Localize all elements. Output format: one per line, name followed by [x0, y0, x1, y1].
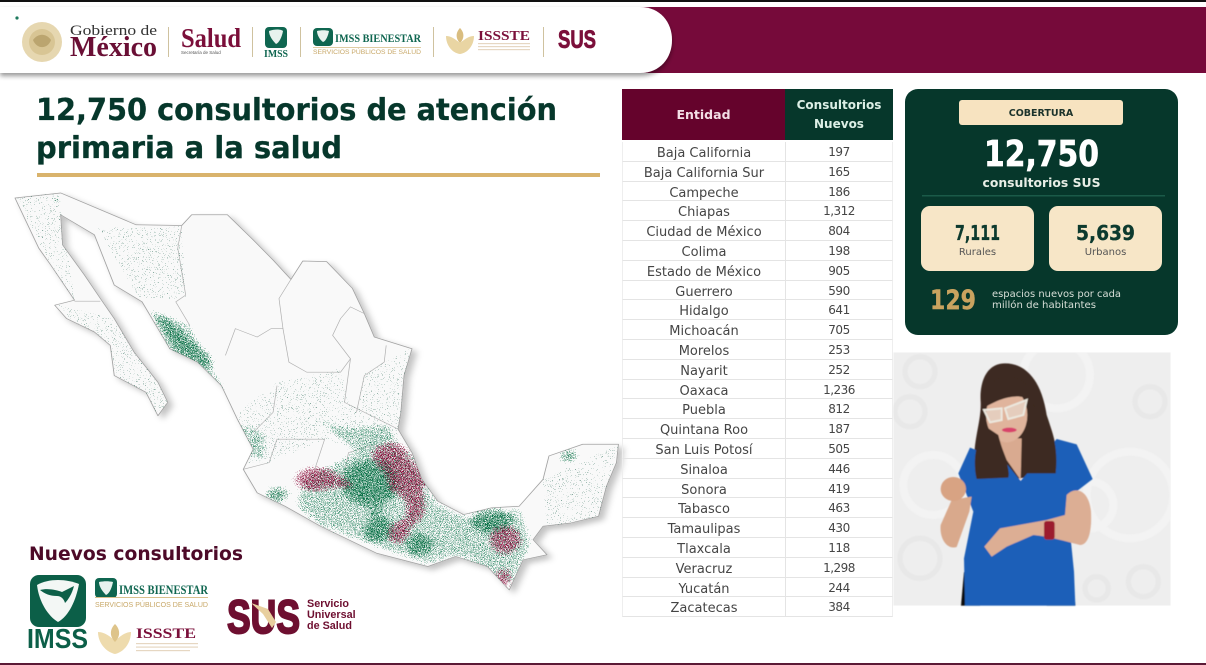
back hair: [974, 363, 1057, 480]
logo: IMSS Bienestar: SERVICIOS PÚBLICOS DE SALUD: [95, 600, 208, 609]
maroon banner: [640, 7, 1206, 73]
stat description: [992, 289, 1121, 311]
table rows: [622, 142, 893, 617]
table rows: Michoacán: [669, 324, 739, 339]
header logos: [15, 16, 596, 63]
table rows: Yucatán: [678, 582, 730, 597]
table rows: 384: [828, 600, 850, 614]
medium dots: [150, 310, 532, 585]
face: [986, 388, 1027, 442]
stat description: millón de habitantes: [992, 300, 1096, 311]
table rows: 430: [828, 521, 850, 535]
table rows: 253: [828, 343, 850, 357]
lower arm: [984, 490, 1091, 557]
title: [36, 93, 557, 166]
logo: Salud: Secretaría de Salud: [181, 50, 221, 55]
blouse: [958, 439, 1093, 606]
stat description: espacios nuevos por cada: [992, 289, 1121, 300]
table rows: Campeche: [669, 186, 739, 201]
raised fist: [941, 477, 966, 501]
table rows: 197: [828, 145, 850, 159]
logo: IMSS: [252, 27, 288, 60]
table header: Entidad: [676, 107, 731, 122]
raised arm: [941, 497, 972, 547]
table rows: Sonora: [681, 483, 727, 498]
table rows: Morelos: [679, 344, 729, 359]
bottom edge: [0, 663, 1206, 665]
white logo pill: [0, 7, 672, 73]
title: 12,750 consultorios de atención: [36, 93, 557, 128]
logo: Servicio Universal de Salud: Servicio: [307, 598, 349, 610]
table rows: 198: [828, 244, 850, 258]
logo: Servicio Universal de Salud: Universal: [307, 609, 356, 621]
table rows: 705: [828, 323, 850, 337]
table rows: Oaxaca: [680, 384, 728, 399]
table rows: 165: [828, 165, 850, 179]
table rows: Chiapas: [678, 205, 730, 220]
logo: SUS: [543, 26, 596, 57]
cobertura tag: [959, 100, 1123, 125]
logo: IMSS: [27, 575, 88, 654]
table rows: Zacatecas: [671, 601, 737, 616]
table header: Nuevos: [814, 116, 864, 130]
card: rurales: 7,111: [955, 221, 1000, 245]
card: urbanos: Urbanos: [1085, 247, 1126, 258]
table rows: 244: [828, 581, 850, 595]
sparse dots: [15, 195, 618, 526]
title underline: [37, 173, 600, 177]
table rows: Hidalgo: [679, 304, 729, 319]
logo: Salud: Salud: [181, 23, 241, 53]
table rows: 505: [828, 442, 850, 456]
table rows: 590: [828, 284, 850, 298]
lips: [1002, 428, 1017, 432]
table rows: 118: [828, 541, 850, 555]
trousers: [961, 572, 1075, 606]
table rows: 252: [828, 363, 850, 377]
glasses: [984, 400, 1027, 422]
table rows: Veracruz: [676, 562, 732, 577]
card: rurales: Rurales: [959, 247, 996, 258]
photo: sign language interpreter: [893, 342, 1173, 606]
total label: consultorios SUS: [982, 176, 1100, 190]
logo: ISSSTE: ISSSTE: [478, 28, 530, 43]
table rows: 804: [828, 224, 850, 238]
table rows: 463: [828, 501, 850, 515]
table rows: 1,236: [823, 383, 855, 397]
footer logos: [27, 575, 356, 654]
logo: Servicio Universal de Salud: de Salud: [307, 620, 352, 632]
state borders: [75, 225, 398, 473]
clinic dots clipped to the country: [15, 192, 618, 593]
top black edge: [0, 0, 1206, 2]
heading: Nuevos consultorios: Nuevos consultorios: [29, 543, 243, 565]
logo: IMSS Bienestar: [300, 27, 421, 57]
logo: Salud: [168, 23, 241, 57]
table rows: San Luis Potosí: [655, 443, 753, 458]
table rows: 187: [828, 422, 850, 436]
patterned backdrop: [893, 342, 1173, 606]
logo: Gobierno de México: Gobierno de: [70, 23, 157, 39]
table rows: Baja California: [657, 146, 751, 161]
table rows: 186: [828, 185, 850, 199]
table rows: 419: [828, 482, 850, 496]
logo: IMSS: IMSS: [27, 623, 88, 654]
table rows: Puebla: [682, 403, 726, 418]
logo: Gobierno de México: México: [70, 32, 157, 63]
map landmass: [15, 193, 618, 590]
logo: IMSS: IMSS: [264, 49, 288, 60]
table rows: 1,312: [823, 204, 855, 218]
table rows: 812: [828, 402, 850, 416]
table rows: 446: [828, 462, 850, 476]
stat: 129: 129: [930, 285, 976, 316]
table rows: Quintana Roo: [660, 423, 748, 438]
logo: Gobierno de México: [15, 16, 157, 63]
total number: 12,750: [984, 134, 1099, 175]
table: consultorios nuevos por entidad: [622, 89, 893, 617]
dense maroon dots: [288, 438, 527, 593]
title: primaria a la salud: [36, 131, 342, 166]
table rows: 1,298: [823, 561, 855, 575]
logo: ISSSTE: [98, 624, 198, 654]
table rows: Ciudad de México: [646, 225, 762, 240]
table rows: Nayarit: [680, 364, 728, 379]
logo: IMSS Bienestar: IMSS BIENESTAR: [335, 31, 421, 45]
logo: ISSSTE: [433, 27, 530, 57]
table rows: Estado de México: [647, 265, 761, 280]
panel: cobertura: [905, 89, 1178, 335]
table rows: Tlaxcala: [677, 542, 731, 557]
table rows: Tabasco: [678, 502, 730, 517]
logo: IMSS Bienestar: IMSS BIENESTAR: [119, 582, 208, 597]
table header: [622, 89, 893, 140]
table rows: 641: [828, 303, 850, 317]
card: rurales: [921, 206, 1034, 271]
table header: Consultorios: [797, 98, 881, 112]
map of Mexico with new clinic dots: [15, 192, 618, 593]
table rows: 905: [828, 264, 850, 278]
logo: SUS: SUS: [558, 26, 596, 54]
table rows: Sinaloa: [680, 463, 728, 478]
table rows: Guerrero: [675, 285, 733, 300]
header band: [0, 7, 1206, 73]
table rows: Baja California Sur: [644, 166, 764, 181]
logo: Servicio Universal de Salud: SUS: [227, 590, 300, 643]
neck: [998, 438, 1022, 480]
dense green dots: [44, 192, 584, 561]
cobertura tag: COBERTURA: [1009, 108, 1074, 119]
logo: IMSS Bienestar: [95, 578, 208, 609]
front hair: [975, 402, 1056, 479]
table rows: Colima: [682, 245, 726, 260]
wristband: [1044, 521, 1055, 540]
card: urbanos: 5,639: [1076, 221, 1135, 245]
fringe: [983, 376, 1030, 408]
logo: ISSSTE: ISSSTE: [136, 626, 196, 642]
card: urbanos: [1049, 206, 1162, 271]
table rows: Tamaulipas: [668, 522, 740, 537]
interpreter figure: [941, 363, 1093, 606]
logo: IMSS Bienestar: SERVICIOS PÚBLICOS DE SALUD: [313, 47, 421, 56]
